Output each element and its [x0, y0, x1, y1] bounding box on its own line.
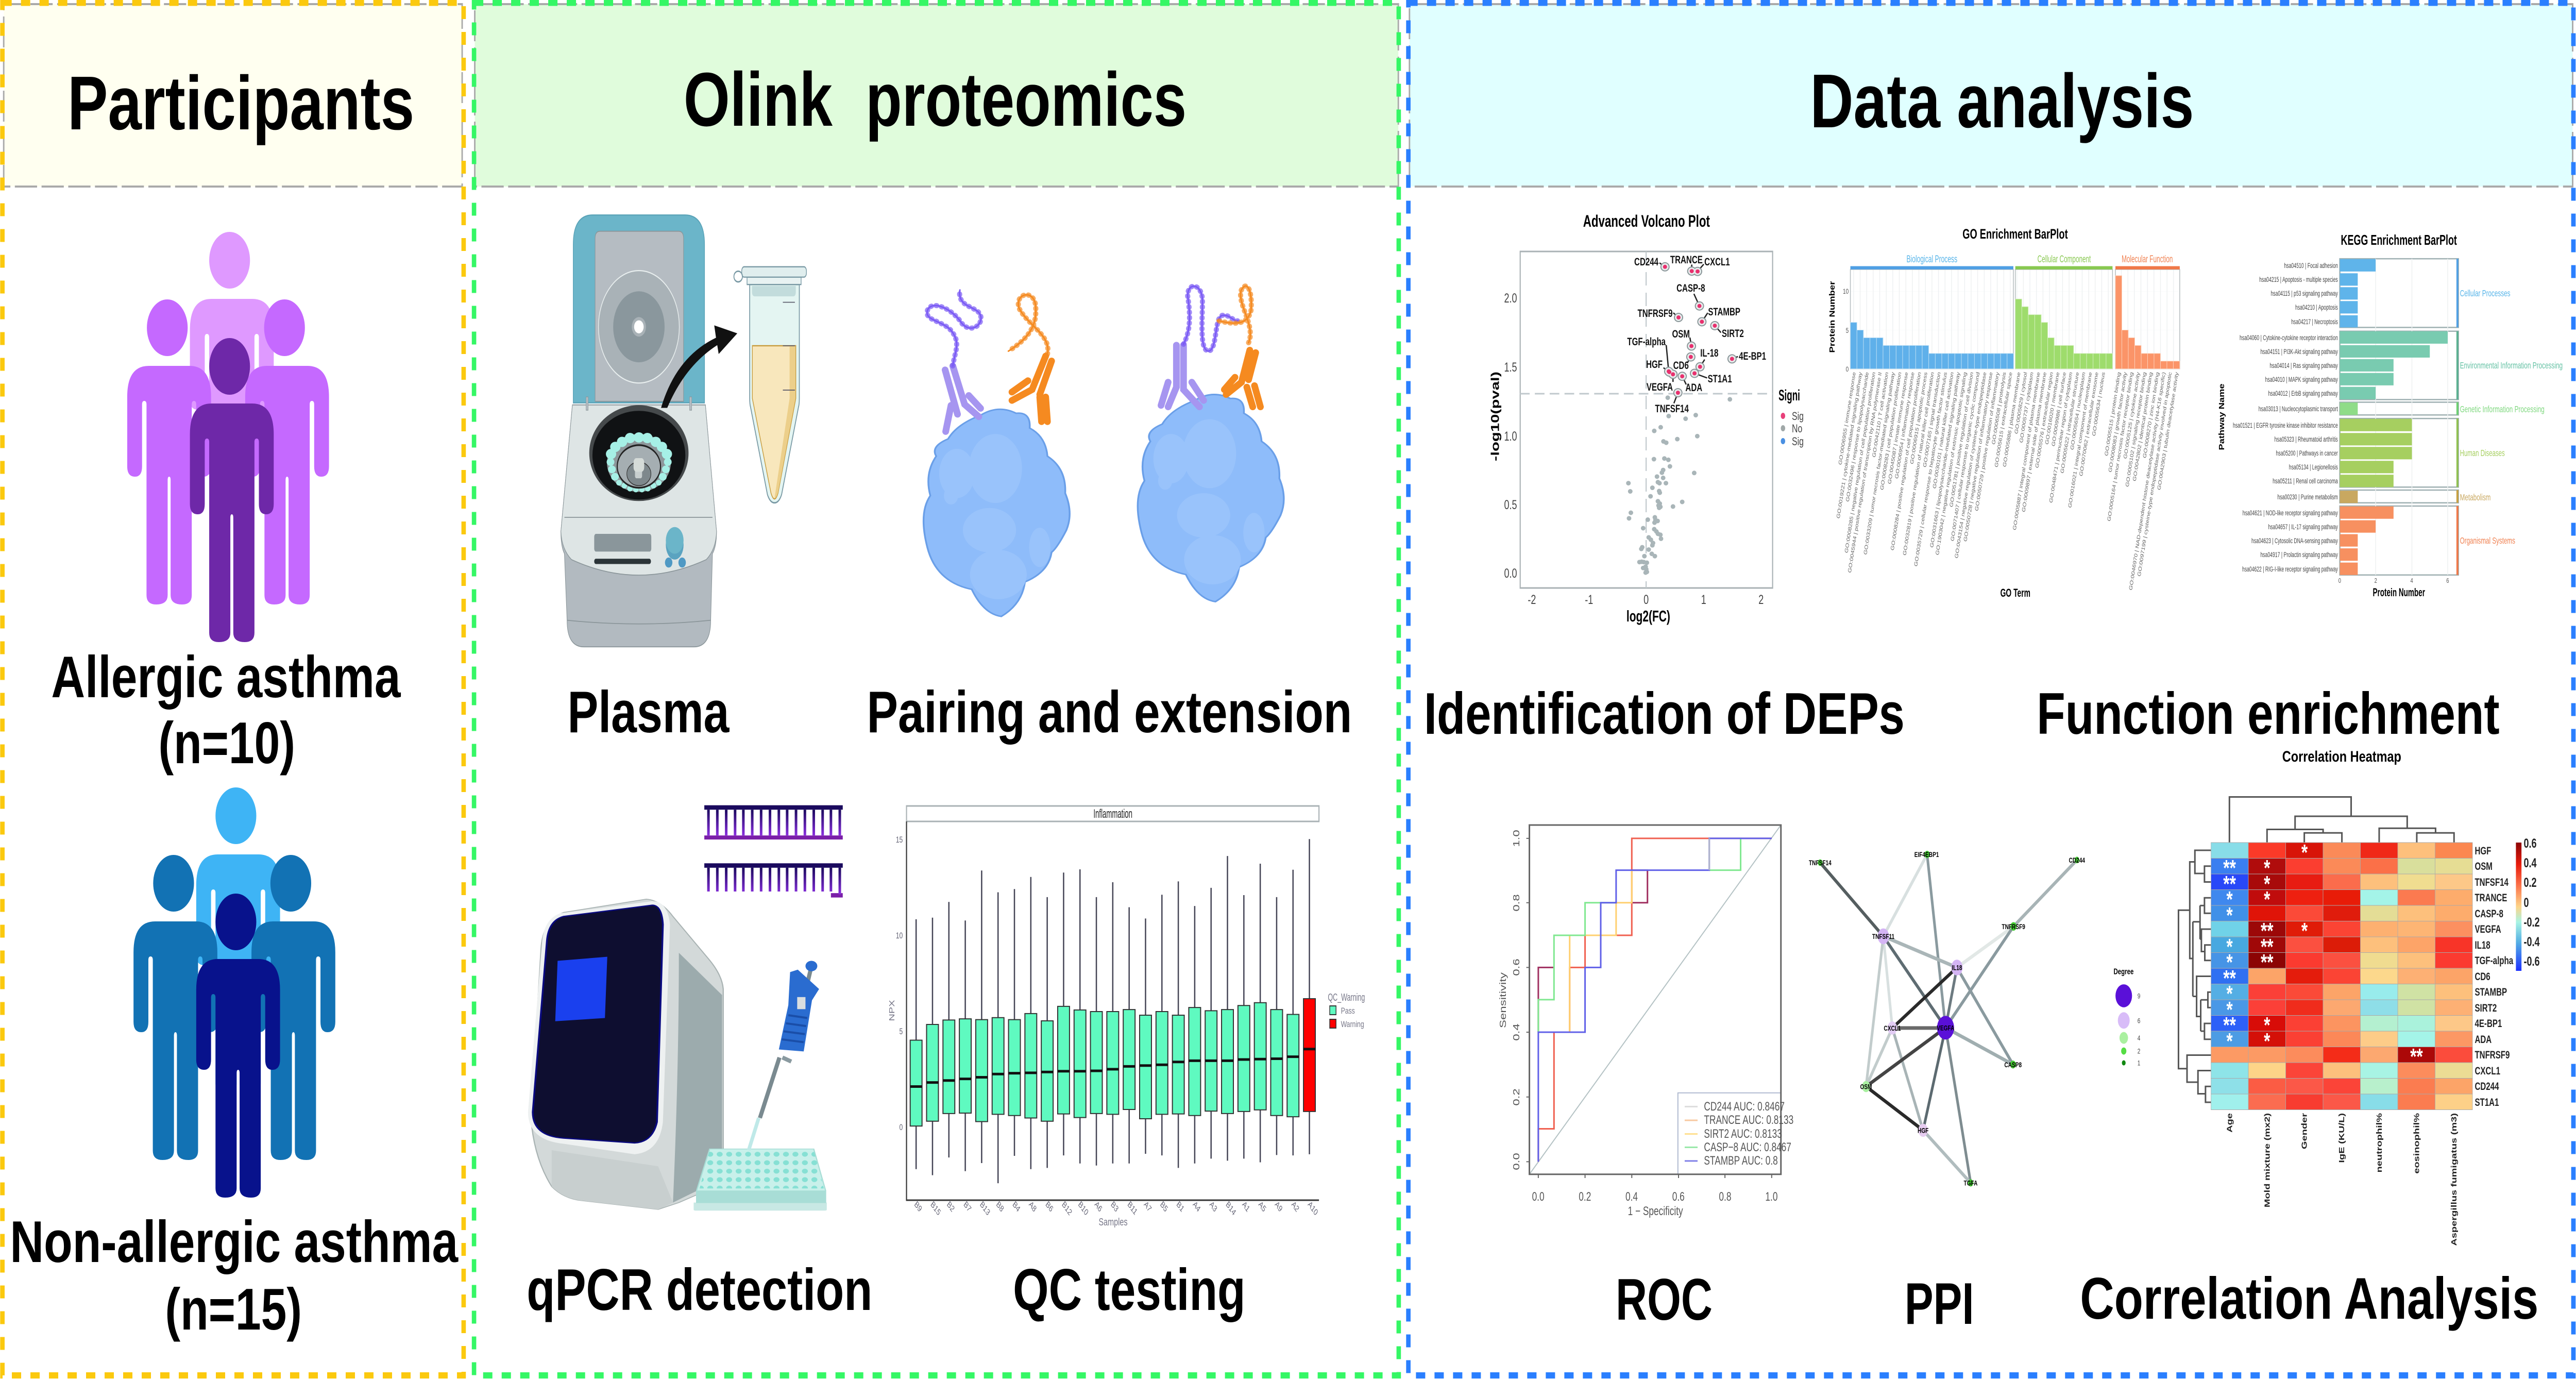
chart: ROC curves: 1.0	[1512, 830, 1521, 847]
chart: correlation heatmap: neutrophil%	[2375, 1113, 2383, 1172]
chart: GO enrichment bar plot: 0	[1846, 365, 1849, 373]
chart: volcano plot: CD6	[1673, 359, 1689, 372]
chart: ROC curves: TRANCE AUC: 0.8133	[1704, 1113, 1793, 1127]
chart: QC boxplot: A1	[1241, 1200, 1251, 1214]
chart: volcano plot: CD244	[1634, 255, 1659, 268]
chart: correlation heatmap: 0.6	[2523, 836, 2536, 851]
label: PPI: PPI	[1905, 1271, 1974, 1337]
chart: ROC curves: 0.0	[1512, 1153, 1521, 1170]
chart: GO enrichment bar plot: GO:0045944 | positive regulation of transcription by RNA polymerase II	[1847, 372, 1883, 574]
chart: volcano plot: IL-18	[1700, 346, 1718, 359]
chart: volcano plot: ST1A1	[1708, 372, 1732, 385]
data analysis dashed frame	[1409, 3, 2573, 1375]
label: qPCR detection: qPCR detection	[527, 1257, 872, 1323]
chart: GO enrichment bar plot: GO:0005737 | cytoplasm	[2019, 372, 2035, 444]
chart: volcano plot: CXCL1	[1704, 255, 1730, 268]
chart: QC boxplot: B10	[1077, 1200, 1090, 1218]
label: Plasma: Plasma	[568, 680, 730, 745]
chart: GO enrichment bar plot: Cellular Component	[2038, 254, 2091, 265]
chart: GO enrichment bar plot: GO:0005125 | cytokine activity	[2123, 371, 2141, 460]
chart: KEGG enrichment bar plot: hsa05211 | Renal cell carcinoma	[2273, 477, 2338, 485]
chart: correlation heatmap: *	[2226, 934, 2233, 960]
chart: ROC curves: 0.4	[1625, 1190, 1638, 1204]
chart: correlation heatmap: TGF-alpha	[2475, 954, 2514, 967]
chart: GO enrichment bar plot: GO:0006954 | inflammatory response	[1894, 372, 1916, 479]
chart: GO enrichment bar plot: GO:0045087 | innate immune response	[1887, 372, 1909, 485]
label: Correlation Analysis: Correlation Analysis	[2080, 1266, 2538, 1332]
chart: QC boxplot: B8	[995, 1200, 1005, 1214]
chart: GO enrichment bar plot: GO:0032819 | positive regulation of natural killer cell proliferation	[1902, 372, 1935, 556]
chart: volcano plot: Signi	[1778, 386, 1800, 404]
chart: QC boxplot: NPX	[888, 1000, 896, 1021]
panel: Olink proteomics	[474, 3, 1399, 1375]
chart: KEGG enrichment bar plot: hsa00230 | Purine metabolism	[2277, 493, 2338, 501]
chart: GO enrichment bar plot: GO:0042802 | identical protein binding	[2132, 372, 2154, 482]
chart: KEGG enrichment bar plot: hsa04115 | p53 signaling pathway	[2270, 289, 2338, 297]
chart: PPI network: IL18	[1952, 964, 1962, 972]
chart: QC boxplot: A7	[1142, 1200, 1153, 1214]
chart: GO enrichment bar plot: GO:0042110 | T cell activation	[1872, 372, 1890, 458]
data analysis header band	[1410, 4, 2573, 187]
label: n=15: (n=15)	[165, 1277, 302, 1342]
label: ROC: ROC	[1616, 1267, 1713, 1333]
chart: ROC curves: 0.8	[1512, 894, 1521, 912]
chart: KEGG enrichment bar plot: 4	[2410, 578, 2413, 584]
chart: KEGG enrichment bar plot: hsa04217 | Necroptosis	[2291, 317, 2338, 326]
chart: correlation heatmap: **	[2223, 855, 2236, 881]
chart: GO enrichment bar plot: GO:0051781 | positive regulation of cell division	[1949, 372, 1975, 508]
chart: QC boxplot: A6	[1093, 1200, 1103, 1214]
chart: GO enrichment bar plot: GO:0005654 | nucleoplasm	[2070, 372, 2087, 450]
chart: volcano plot: 1	[1701, 592, 1706, 607]
chart: volcano plot: -log10(pval)	[1488, 372, 1501, 461]
chart: volcano plot: No	[1792, 423, 1802, 435]
chart: QC boxplot: B11	[1126, 1200, 1139, 1217]
chart: ROC curves: 0.0	[1532, 1190, 1545, 1204]
chart: GO enrichment bar plot: GO:0005576 | extracellular region	[2035, 372, 2054, 469]
icon: centrifuge and tube	[561, 215, 806, 647]
chart: KEGG enrichment bar plot: hsa04012 | ErbB signaling pathway	[2268, 389, 2338, 397]
chart: GO enrichment bar plot: GO:0009897 | external side of plasma membrane	[2021, 372, 2047, 513]
chart: GO enrichment bar plot	[1828, 226, 2180, 600]
chart: KEGG enrichment bar plot: 0	[2338, 578, 2341, 584]
chart: correlation heatmap: *	[2264, 855, 2270, 881]
chart: KEGG enrichment bar plot	[2217, 232, 2563, 599]
chart: correlation heatmap: ADA	[2475, 1033, 2492, 1046]
chart: QC boxplot: B12	[1060, 1200, 1073, 1218]
chart: correlation heatmap: IL18	[2475, 938, 2490, 951]
chart: QC boxplot: Warning	[1341, 1020, 1364, 1030]
chart: PPI network	[1809, 851, 2141, 1187]
chart: correlation heatmap: VEGFA	[2475, 922, 2501, 935]
chart: GO enrichment bar plot: GO:0046970 | NAD-dependent histone deacetylase activity (H4-K16 specific)	[2128, 372, 2166, 591]
chart: GO enrichment bar plot: GO:0008283 | cell population proliferation	[1879, 372, 1903, 491]
heading: Data analysis: Data analysis	[1810, 59, 2194, 144]
chart: correlation heatmap: *	[2226, 887, 2233, 912]
chart: correlation heatmap	[2178, 747, 2539, 1246]
chart: correlation heatmap: **	[2223, 871, 2236, 897]
chart: QC boxplot: 0	[900, 1123, 903, 1133]
chart: correlation heatmap: -0.2	[2523, 915, 2539, 930]
chart: GO enrichment bar plot: GO:0006955 | immune response	[1838, 372, 1857, 465]
chart: GO enrichment bar plot: Protein Number	[1828, 281, 1836, 352]
chart: correlation heatmap: *	[2226, 950, 2233, 975]
chart: correlation heatmap: 0.4	[2523, 855, 2536, 870]
chart: KEGG enrichment bar plot: Organismal Systems	[2460, 536, 2515, 546]
chart: KEGG enrichment bar plot: Human Diseases	[2460, 448, 2505, 459]
chart: PPI network: CD244	[2069, 856, 2085, 864]
chart: ROC curves: 0.8	[1719, 1190, 1731, 1204]
chart: PPI network: CXCL1	[1884, 1024, 1901, 1032]
heading: Olink proteomics: Olink proteomics	[684, 57, 1187, 142]
chart: KEGG enrichment bar plot: hsa03013 | Nucleocytoplasmic transport	[2259, 405, 2338, 413]
chart: KEGG enrichment bar plot: Environmental Information Processing	[2460, 361, 2563, 371]
chart: volcano plot: STAMBP	[1708, 305, 1740, 318]
chart: QC boxplot: B15	[929, 1200, 942, 1218]
chart: KEGG enrichment bar plot: hsa04622 | RIG-I-like receptor signaling pathway	[2242, 565, 2338, 573]
chart: correlation heatmap: *	[2301, 840, 2308, 865]
chart: KEGG enrichment bar plot: Protein Number	[2372, 587, 2425, 599]
chart: correlation heatmap: *	[2264, 1029, 2270, 1054]
chart: KEGG enrichment bar plot: 6	[2446, 578, 2449, 584]
chart: QC boxplot: B2	[945, 1200, 956, 1214]
chart: correlation heatmap: **	[2261, 934, 2274, 960]
chart: ROC curves	[1498, 825, 1793, 1218]
chart: GO enrichment bar plot: GO:0008284 | positive regulation of cell population proliferation	[1890, 372, 1922, 551]
chart: correlation heatmap: Gender	[2300, 1113, 2309, 1149]
heading: Participants: Participants	[67, 61, 414, 146]
chart: volcano plot: TNFSF14	[1655, 402, 1689, 415]
chart: volcano plot: 0.5	[1504, 497, 1517, 512]
label: QC testing: QC testing	[1013, 1257, 1246, 1323]
chart: PPI network: Degree	[2113, 966, 2134, 976]
chart: GO enrichment bar plot: GO:0005164 | tumor necrosis factor receptor binding	[2107, 372, 2134, 522]
chart: QC boxplot: A8	[1027, 1200, 1038, 1214]
chart: correlation heatmap: *	[2264, 887, 2270, 912]
chart: correlation heatmap: *	[2226, 997, 2233, 1022]
chart: GO enrichment bar plot: Molecular Function	[2122, 254, 2173, 265]
chart: ROC curves: 0.2	[1512, 1088, 1521, 1106]
chart: GO enrichment bar plot: GO:0031663 | lipopolysaccharide-mediated signaling pathway	[1929, 371, 1961, 548]
chart: GO enrichment bar plot: GO:0030101 | natural killer cell activation	[1932, 372, 1955, 490]
chart: correlation heatmap: 4E-BP1	[2475, 1017, 2502, 1030]
chart: correlation heatmap: -0.4	[2523, 934, 2539, 949]
chart: volcano plot: 4E-BP1	[1739, 349, 1766, 362]
chart: volcano plot: 0.0	[1504, 566, 1517, 581]
chart: volcano plot: TRANCE	[1670, 253, 1703, 266]
chart: QC boxplot: Samples	[1099, 1216, 1128, 1228]
chart: correlation heatmap: HGF	[2475, 844, 2491, 857]
chart: volcano plot: SIRT2	[1722, 327, 1744, 340]
chart: KEGG enrichment bar plot: hsa04215 | Apoptosis - multiple species	[2259, 275, 2338, 283]
chart: KEGG enrichment bar plot: hsa05200 | Pathways in cancer	[2276, 449, 2338, 457]
chart: correlation heatmap: ST1A1	[2475, 1096, 2499, 1108]
chart: QC boxplot: Pass	[1341, 1006, 1355, 1016]
Olink header band	[475, 4, 1398, 187]
chart: KEGG enrichment bar plot: hsa04917 | Prolactin signaling pathway	[2260, 550, 2338, 559]
chart: GO enrichment bar plot: GO:0097199 | cysteine-type endopeptidase activity involved in apoptotic	[2137, 371, 2173, 577]
chart: ROC curves: 1.0	[1765, 1190, 1777, 1204]
chart: QC boxplot	[888, 806, 1365, 1228]
chart: QC boxplot: A5	[1257, 1200, 1267, 1214]
chart: correlation heatmap: 0	[2523, 895, 2529, 910]
label: Pairing and extension: Pairing and extension	[867, 680, 1352, 745]
chart: correlation heatmap: *	[2226, 903, 2233, 928]
chart: GO enrichment bar plot: GO:0033209 | tumor necrosis factor-mediated signaling pathway	[1863, 371, 1896, 556]
chart: GO enrichment bar plot: GO:0032496 | response to lipopolysaccharide	[1845, 372, 1870, 502]
chart: GO enrichment bar plot: Biological Process	[1907, 254, 1957, 265]
chart: PPI network: EIF4EBP1	[1914, 851, 1939, 859]
chart: KEGG enrichment bar plot: hsa05134 | Legionellosis	[2289, 463, 2338, 471]
chart: KEGG enrichment bar plot: hsa04014 | Ras signaling pathway	[2269, 361, 2338, 369]
chart: correlation heatmap: TRANCE	[2475, 891, 2507, 904]
chart: correlation heatmap: **	[2410, 1044, 2423, 1069]
chart: volcano plot: Sig	[1792, 436, 1804, 448]
chart: QC boxplot: B6	[1044, 1200, 1054, 1214]
chart: GO enrichment bar plot: GO:0008083 | growth factor activity	[2108, 371, 2128, 473]
chart: QC boxplot: 10	[896, 931, 903, 941]
chart: volcano plot: 2.0	[1504, 291, 1517, 306]
chart: correlation heatmap: *	[2226, 1029, 2233, 1054]
chart: correlation heatmap: *	[2226, 981, 2233, 1006]
chart: volcano plot: -1	[1585, 592, 1593, 607]
chart: correlation heatmap: CXCL1	[2475, 1064, 2500, 1077]
chart: volcano plot: 1.0	[1504, 429, 1517, 444]
chart: correlation heatmap: OSM	[2475, 860, 2493, 872]
chart: volcano plot: Sig	[1792, 411, 1804, 423]
chart: KEGG enrichment bar plot: Metabolism	[2460, 493, 2490, 503]
chart: GO enrichment bar plot: GO:0009986 | cell surface	[2051, 372, 2067, 447]
chart: GO enrichment bar plot: GO:0016020 | membrane	[2044, 372, 2061, 445]
chart: correlation heatmap: SIRT2	[2475, 1001, 2497, 1014]
chart: QC boxplot: B7	[962, 1200, 972, 1214]
chart: GO enrichment bar plot: GO:0005102 | signaling receptor binding	[2125, 372, 2147, 487]
panel: data analysis	[1409, 3, 2573, 1375]
chart: KEGG enrichment bar plot: hsa01521 | EGFR tyrosine kinase inhibitor resistance	[2233, 421, 2338, 429]
icon: pairing and extension proteins	[924, 286, 1284, 616]
chart: GO enrichment bar plot: GO:0006508 | proteolysis	[1991, 371, 2007, 445]
chart: PPI network: TGFA	[1964, 1179, 1978, 1187]
chart: volcano plot: -2	[1528, 592, 1536, 607]
chart: correlation heatmap: CD6	[2475, 970, 2490, 983]
chart: GO enrichment bar plot: GO:0035729 | cellular response to hepatocyte growth factor stimulus	[1913, 371, 1948, 567]
chart: GO enrichment bar plot: GO:0005515 | protein binding	[2104, 372, 2122, 457]
chart: volcano plot: OSM	[1672, 327, 1690, 340]
chart: ROC curves: STAMBP AUC: 0.8	[1704, 1154, 1778, 1168]
chart: GO enrichment bar plot: GO:0005886 | plasma membrane	[2002, 372, 2022, 468]
chart: QC boxplot: 15	[896, 835, 903, 845]
chart: QC boxplot: A4	[1191, 1200, 1201, 1214]
chart: PPI network: TNFSF14	[1809, 859, 1832, 867]
chart: PPI network: TNFSF11	[1872, 932, 1894, 940]
chart: KEGG enrichment bar plot: hsa04657 | IL-17 signaling pathway	[2268, 523, 2338, 531]
chart: correlation heatmap: STAMBP	[2475, 985, 2507, 998]
chart: volcano plot: 2	[1758, 592, 1764, 607]
chart: PPI network: VEGFA	[1937, 1024, 1955, 1032]
chart: PPI network: 6	[2138, 1017, 2141, 1025]
participants dashed frame	[3, 3, 464, 1375]
chart: PPI network: CASP8	[2004, 1061, 2022, 1069]
chart: QC boxplot: A9	[1273, 1200, 1283, 1214]
chart: volcano plot: VEGFA	[1647, 380, 1673, 393]
chart: QC boxplot: B4	[1011, 1200, 1021, 1214]
chart: correlation heatmap: Aspergillus fumigatus (m3)	[2450, 1113, 2458, 1246]
chart: KEGG enrichment bar plot: hsa05323 | Rheumatoid arthritis	[2275, 435, 2338, 443]
chart: KEGG enrichment bar plot: 2	[2375, 578, 2377, 584]
chart: correlation heatmap: -0.6	[2523, 954, 2539, 969]
chart: PPI network: OSM	[1860, 1083, 1872, 1091]
chart: GO enrichment bar plot: GO:0008285 | negative regulation of cell population proliferation	[1844, 372, 1876, 553]
chart: volcano plot: HGF	[1646, 358, 1663, 371]
Olink dashed frame	[474, 3, 1399, 1375]
chart: correlation heatmap: TNFSF14	[2475, 876, 2509, 888]
chart: correlation heatmap: Correlation Heatmap	[2282, 747, 2401, 765]
chart: QC boxplot: B9	[913, 1200, 923, 1214]
chart: GO enrichment bar plot: GO:0070062 | extracellular exosome	[2079, 372, 2099, 477]
chart: KEGG enrichment bar plot: hsa04060 | Cytokine-cytokine receptor interaction	[2240, 333, 2338, 342]
chart: correlation heatmap: **	[2223, 1013, 2236, 1038]
chart: correlation heatmap: *	[2264, 871, 2270, 897]
chart: GO enrichment bar plot: GO:0016021 | integral component of membrane	[2067, 372, 2093, 509]
chart: QC boxplot: B14	[1224, 1200, 1237, 1218]
chart: correlation heatmap: **	[2223, 966, 2236, 991]
chart: KEGG enrichment bar plot: hsa04010 | MAPK signaling pathway	[2265, 375, 2338, 383]
chart: volcano plot: ADA	[1685, 381, 1702, 394]
chart: GO enrichment bar plot: GO:1903042 | negative regulation of extrinsic apoptotic signaling	[1935, 372, 1968, 556]
chart: GO enrichment bar plot: GO:0050729 | positive regulation of inflammatory	[1974, 371, 2001, 512]
chart: correlation heatmap: 0.2	[2523, 875, 2536, 890]
chart: GO enrichment bar plot: GO:0019221 | cytokine-mediated signaling pathway	[1836, 371, 1863, 519]
chart: KEGG enrichment bar plot: Cellular Processes	[2460, 289, 2511, 299]
chart: GO enrichment bar plot: GO:0007165 | signal transduction	[1922, 372, 1942, 468]
chart: ROC curves: 0.6	[1672, 1190, 1685, 1204]
chart: PPI network: 9	[2138, 992, 2141, 1000]
label: Non-allergic asthma: Non-allergic asthma	[10, 1209, 459, 1275]
chart: ROC curves: Sensitivity	[1498, 972, 1508, 1028]
chart: GO enrichment bar plot: 5	[1846, 326, 1849, 334]
chart: GO enrichment bar plot: GO:0005634 | nucleus	[2091, 371, 2106, 437]
chart: PPI network: TNFRSF9	[2002, 922, 2025, 931]
chart: ROC curves: SIRT2 AUC: 0.8133	[1704, 1127, 1782, 1141]
chart: volcano plot: TGF-alpha	[1627, 335, 1666, 348]
chart: ROC curves: CASP−8 AUC: 0.8467	[1704, 1140, 1791, 1154]
chart: KEGG enrichment bar plot: Genetic Information Processing	[2460, 405, 2545, 415]
chart: GO enrichment bar plot: GO:0005615 | extracellular space	[1994, 372, 2013, 468]
icon: non-allergic asthma group	[133, 787, 335, 1198]
chart: KEGG enrichment bar plot: hsa04151 | PI3K-Akt signaling pathway	[2260, 347, 2338, 356]
chart: GO enrichment bar plot: 10	[1843, 287, 1849, 295]
chart: correlation heatmap: *	[2301, 918, 2308, 944]
chart: GO enrichment bar plot: GO:0043154 | negative regulation of cysteine-type endopeptidase	[1954, 372, 1988, 559]
chart: correlation heatmap: IgE (KU/L)	[2337, 1113, 2346, 1163]
chart: GO enrichment bar plot: GO Enrichment BarPlot	[1962, 226, 2068, 242]
chart: correlation heatmap: **	[2261, 950, 2274, 975]
chart: correlation heatmap: *	[2264, 1013, 2270, 1038]
chart: volcano plot: 0	[1643, 592, 1649, 607]
chart: volcano plot: 1.5	[1504, 360, 1517, 375]
chart: QC boxplot: B1	[1175, 1200, 1185, 1214]
chart: GO enrichment bar plot: GO:0008270 | zinc ion binding	[2142, 372, 2160, 459]
chart: volcano plot: log2(FC)	[1626, 607, 1670, 625]
chart: QC boxplot: 5	[900, 1027, 903, 1037]
chart: correlation heatmap: **	[2261, 918, 2274, 944]
chart: QC boxplot: A2	[1290, 1200, 1300, 1214]
label: Function enrichment: Function enrichment	[2037, 681, 2500, 747]
chart: KEGG enrichment bar plot: hsa04621 | NOD-like receptor signaling pathway	[2243, 509, 2338, 517]
icon: qPCR machine, pipette, plate and DNA	[528, 805, 843, 1210]
chart: volcano plot: CASP-8	[1676, 281, 1705, 294]
chart: GO enrichment bar plot: GO:0005622 | intracellular structure	[2060, 372, 2080, 474]
chart: PPI network: HGF	[1918, 1126, 1929, 1135]
chart: ROC curves: 0.2	[1579, 1190, 1591, 1204]
chart: correlation heatmap: Mold mixture (mx2)	[2263, 1113, 2272, 1207]
label: Allergic asthma: Allergic asthma	[51, 645, 401, 710]
chart: correlation heatmap: eosinophil%	[2412, 1113, 2421, 1174]
chart: KEGG enrichment bar plot: Pathway Name	[2217, 383, 2226, 450]
chart: PPI network: 4	[2138, 1034, 2141, 1042]
chart: GO enrichment bar plot: GO:0005887 | integral component of plasma membrane	[2012, 372, 2041, 531]
chart: ROC curves: 0.4	[1512, 1023, 1521, 1041]
chart: correlation heatmap: TNFRSF9	[2475, 1048, 2510, 1061]
chart: QC boxplot: B5	[1159, 1200, 1169, 1214]
chart: QC boxplot: QC_Warning	[1328, 991, 1365, 1003]
chart: ROC curves: CD244 AUC: 0.8467	[1704, 1100, 1785, 1114]
chart: ROC curves: 0.6	[1512, 958, 1521, 976]
chart: PPI network: 2	[2138, 1047, 2141, 1055]
chart: QC boxplot: A3	[1208, 1200, 1218, 1214]
chart: correlation heatmap: Age	[2225, 1113, 2234, 1133]
chart: volcano plot	[1488, 212, 1804, 625]
chart: volcano plot: TNFRSF9	[1638, 307, 1673, 319]
chart: GO enrichment bar plot: GO Term	[2001, 587, 2030, 600]
chart: GO enrichment bar plot: GO:0005829 | cytosol	[2014, 372, 2028, 434]
chart: KEGG enrichment bar plot: hsa04510 | Focal adhesion	[2284, 261, 2338, 270]
chart: KEGG enrichment bar plot: hsa04210 | Apoptosis	[2295, 303, 2338, 311]
chart: GO enrichment bar plot: GO:0006915 | apoptotic process	[1909, 371, 1928, 465]
chart: QC boxplot: B3	[1109, 1200, 1120, 1214]
label: Identification of DEPs: Identification of DEPs	[1424, 681, 1905, 747]
label: n=10: (n=10)	[158, 711, 295, 776]
chart: KEGG enrichment bar plot: KEGG Enrichment BarPlot	[2341, 232, 2457, 248]
chart: QC boxplot: A10	[1306, 1200, 1319, 1218]
chart: PPI network: 1	[2138, 1059, 2141, 1067]
chart: GO enrichment bar plot: GO:0050728 | negative regulation of inflammatory response	[1963, 372, 1994, 542]
chart: QC boxplot: B13	[978, 1200, 991, 1218]
participants header band	[4, 4, 462, 187]
chart: GO enrichment bar plot: GO:0048471 | perinuclear region of cytoplasm	[2048, 372, 2074, 503]
chart: correlation heatmap: CD244	[2475, 1080, 2499, 1092]
chart: ROC curves: 1 − Specificity	[1628, 1204, 1683, 1218]
chart: KEGG enrichment bar plot: hsa04623 | Cytosolic DNA-sensing pathway	[2251, 536, 2338, 545]
chart: correlation heatmap: CASP-8	[2475, 907, 2503, 920]
chart: GO enrichment bar plot: GO:0071407 | cellular response to organic cyclic compound	[1950, 372, 1981, 542]
panel: participants	[3, 3, 464, 1375]
chart: QC boxplot: Inflammation	[1093, 807, 1132, 821]
chart: GO enrichment bar plot: GO:0042903 | tubulin deacetylase activity	[2157, 371, 2180, 491]
icon: allergic asthma group	[127, 232, 329, 642]
chart: volcano plot: Advanced Volcano Plot	[1583, 212, 1710, 230]
